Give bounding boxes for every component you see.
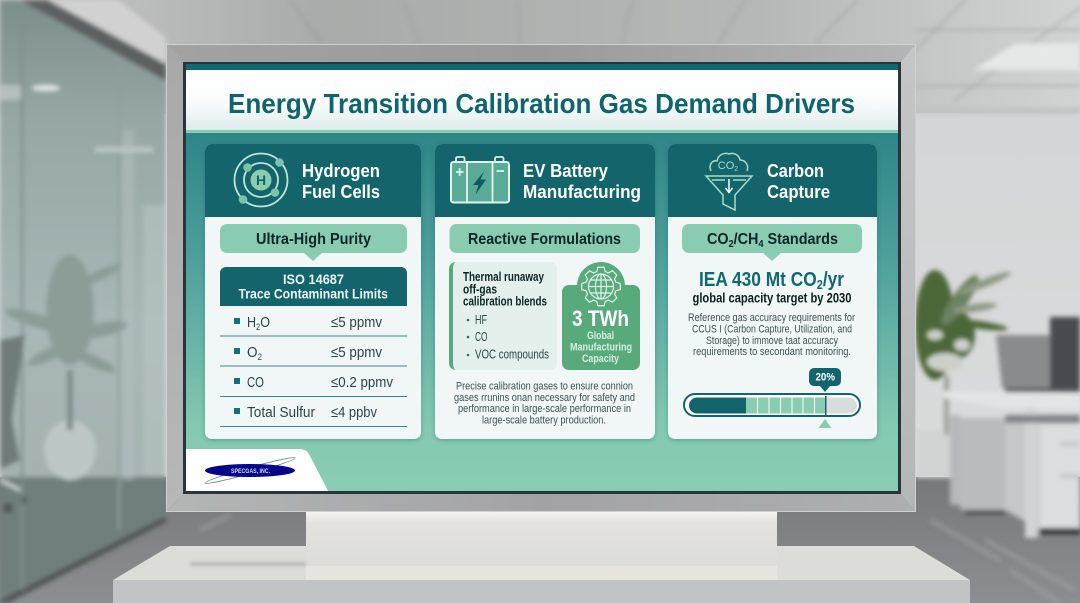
title: Energy Transition Calibration Gas Demand Drivers: [228, 88, 855, 119]
text block: carbon description: Storage) to immove taat accuracy: [706, 335, 838, 347]
pill: co2/ch4 standards: /CH: [734, 231, 758, 248]
stat: iea 430 mt: /yr: [823, 268, 844, 291]
pedestal stand: [113, 512, 970, 603]
pill: co2/ch4 standards: 2: [729, 239, 734, 250]
heading: hydrogen: [302, 160, 380, 202]
pill: reactive formulations: [450, 224, 640, 253]
callout: thermal runaway blends: off-gas: [463, 282, 497, 296]
text block: carbon description: CCUS I (Carbon Capture, Utilization, and: [692, 324, 852, 336]
heading: ev battery: [523, 160, 641, 202]
table rows: O: [247, 344, 259, 361]
pill: co2/ch4 standards: Standards: [763, 231, 838, 248]
icon: gear with globe: [582, 267, 620, 306]
table rows: ≤4 ppbv: [331, 404, 377, 421]
pill: co2/ch4 standards: CO: [707, 231, 731, 248]
table rows: 2: [256, 322, 260, 332]
callout: thermal runaway blends: Thermal runaway: [463, 270, 544, 284]
stat card: 3 TWh: 3 TWh: [572, 306, 629, 331]
text block: ev description: gases rrunins onan necessary for safety and: [454, 392, 635, 404]
icon: co2 funnel: 2: [734, 166, 738, 173]
heading: carbon capture: Carbon: [767, 160, 824, 181]
text block: carbon description: requirements to secondant monitoring.: [693, 346, 851, 358]
panel: hydrogen fuel cells: [205, 144, 421, 439]
icon: co2 funnel: [706, 153, 752, 210]
stat card: 3 TWh: Global: [587, 330, 614, 342]
table rows: O: [260, 314, 270, 331]
table rows: 2: [257, 352, 262, 362]
callout: thermal runaway blends: HF: [475, 313, 487, 327]
table rows: [220, 314, 407, 426]
icon: hydrogen atom: [234, 154, 288, 206]
callout: thermal runaway blends: CO: [475, 330, 488, 344]
table rows: ≤5 ppmv: [331, 314, 382, 331]
pill: co2/ch4 standards: [682, 224, 862, 261]
heading: hydrogen: Fuel Cells: [302, 181, 380, 202]
icon: co2 funnel: CO: [718, 160, 734, 172]
icon: battery: [451, 157, 509, 202]
desk and monitors: [944, 317, 1080, 538]
stat card: 3 TWh: Manufacturing: [570, 342, 632, 354]
table rows: CO: [247, 374, 264, 391]
stat card: 3 TWh: [562, 262, 640, 370]
stat card: 3 TWh: Capacity: [582, 353, 620, 365]
table rows: ≤5 ppmv: [331, 344, 382, 361]
heading: ev battery: EV Battery: [523, 160, 609, 181]
progress bar 20%: [684, 368, 860, 428]
callout: thermal runaway blends: [449, 262, 557, 370]
plant on right: [915, 269, 1012, 478]
heading: carbon capture: [767, 160, 830, 202]
pill: ultra-high purity: Ultra-High Purity: [256, 231, 371, 248]
text block: ev description: large-scale battery production.: [482, 414, 606, 426]
text block: carbon description: [688, 312, 855, 358]
logo: specgas: [186, 449, 328, 491]
text block: ev description: Precise calibration gases to ensure connion: [456, 380, 633, 392]
table header: ISO 14687: [283, 272, 344, 287]
floor grain: [200, 515, 1075, 603]
stat: iea 430 mt: global capacity target by 2030: [692, 291, 852, 306]
table rows: H: [247, 314, 258, 331]
callout: thermal runaway blends: VOC compounds: [475, 348, 549, 362]
pill: co2/ch4 standards: 4: [758, 239, 764, 250]
table rows: Total Sulfur: [247, 404, 315, 421]
pill: ultra-high purity: [220, 224, 407, 261]
panel: carbon capture: [668, 144, 877, 439]
text block: carbon description: Reference gas accuracy requirements for: [688, 312, 855, 324]
table header: [220, 267, 407, 306]
stat: iea 430 mt: [692, 268, 852, 306]
table rows: ≤0.2 ppmv: [331, 374, 393, 391]
glass wall: [0, 0, 166, 603]
heading: carbon capture: Capture: [767, 181, 830, 202]
heading: ev battery: Manufacturing: [523, 181, 641, 202]
text block: ev description: performance in large-scale performance in: [458, 403, 631, 415]
screen background: [186, 64, 898, 491]
table header: Trace Contaminant Limits: [238, 286, 388, 302]
text block: ev description: [454, 380, 635, 426]
panel: ev battery manufacturing: [435, 144, 655, 439]
stat: iea 430 mt: IEA 430 Mt CO: [699, 268, 838, 291]
progress bar 20%: 20%: [816, 372, 835, 384]
callout: thermal runaway blends: calibration blends: [463, 294, 547, 308]
icon: hydrogen atom: H: [256, 172, 266, 188]
display frame: [166, 44, 916, 512]
pill: reactive formulations: Reactive Formulations: [468, 231, 621, 248]
heading: hydrogen: Hydrogen: [302, 160, 380, 181]
logo: specgas: SPECGAS, INC.: [231, 468, 270, 475]
stat: iea 430 mt: 2: [817, 277, 823, 292]
